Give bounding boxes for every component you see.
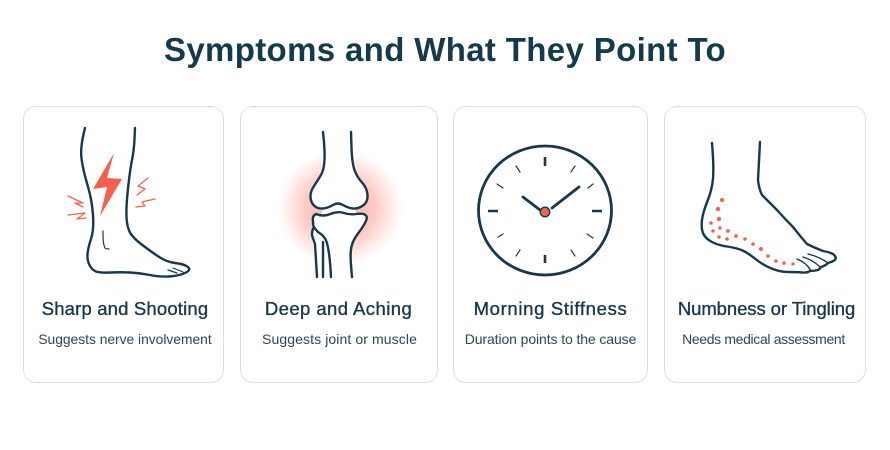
text: joint or muscle: Suggests joint or muscle bbox=[262, 331, 417, 347]
text: duration: Duration points to the cause bbox=[465, 331, 636, 347]
panel: deep and aching bbox=[240, 106, 438, 383]
panel: numbness or tingling bbox=[664, 106, 866, 383]
heading: numbness or tingling: Numbness or Tingling bbox=[678, 298, 855, 319]
icon: leg with lightning bbox=[68, 128, 189, 277]
icon: foot with tingling dots bbox=[702, 142, 836, 273]
icon: knee joint with glow bbox=[277, 132, 403, 277]
text: nerve involvement: Suggests nerve involvement bbox=[38, 332, 212, 347]
text: medical assessment: Needs medical assessment bbox=[682, 331, 845, 347]
heading: deep and aching: Deep and Aching bbox=[265, 298, 412, 319]
panel: morning stiffness bbox=[453, 106, 648, 383]
heading: morning stiffness: Morning Stiffness bbox=[474, 298, 627, 319]
panel: sharp and shooting bbox=[23, 106, 224, 383]
heading: sharp and shooting: Sharp and Shooting bbox=[42, 298, 208, 319]
icon: clock bbox=[478, 146, 612, 275]
title: Symptoms and What They Point To bbox=[164, 31, 726, 68]
